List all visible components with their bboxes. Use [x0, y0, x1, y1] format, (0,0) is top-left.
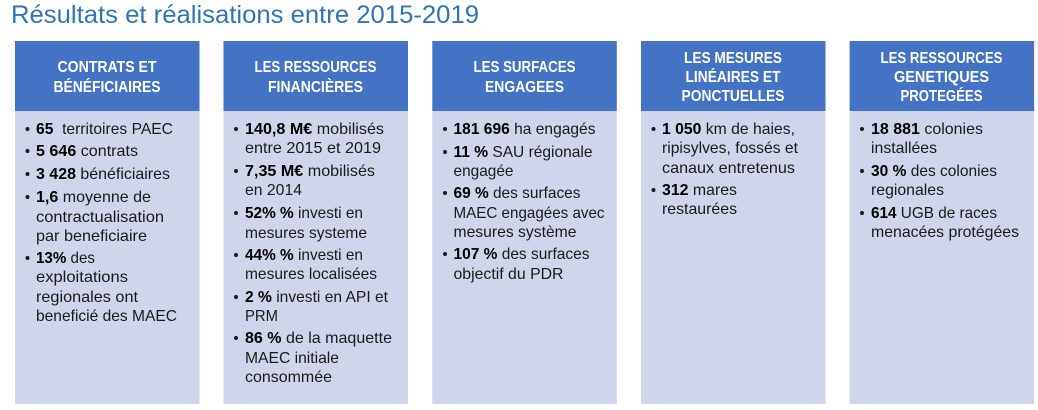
- text block: ressources financières list: 7,35 M€ mobilisés: [245, 163, 375, 180]
- text block: contrats et bénéficiaires list: regionales ont: [36, 289, 139, 306]
- panel: les ressources financières: [224, 41, 408, 404]
- text block: mesures linéaires list: [652, 121, 799, 218]
- text block: ressources financières list: 52% % investi en: [245, 205, 363, 222]
- text block: ressources financières list: 140,8 M€ mobilisés: [245, 121, 384, 138]
- heading: les ressources génétiques protégées: LES RESSOURCES: [880, 50, 1002, 67]
- heading: les ressources financières: [254, 59, 376, 96]
- text block: contrats et bénéficiaires list: 3 428 bénéficiaires: [36, 166, 170, 183]
- heading: les ressources génétiques protégées: GENETIQUES: [894, 69, 989, 86]
- heading: contrats et bénéficiaires: BÉNÉFICIAIRES: [54, 79, 160, 96]
- text block: ressources financières list: entre 2015 et 2019: [245, 140, 381, 157]
- text block: mesures linéaires list: restaurées: [662, 201, 737, 218]
- text block: ressources financières list: consommée: [245, 369, 332, 386]
- text block: ressources financières list: PRM: [245, 308, 278, 325]
- text block: ressources génétiques list: 18 881 colonies: [871, 121, 983, 138]
- text block: ressources génétiques list: regionales: [871, 182, 944, 199]
- text block: ressources financières list: [234, 121, 392, 386]
- heading: les mesures linéaires et ponctuelles: [682, 50, 784, 105]
- text block: contrats et bénéficiaires list: [26, 121, 177, 325]
- text block: contrats et bénéficiaires list: exploitations: [36, 269, 128, 286]
- text block: mesures linéaires list: ripisylves, fossés et: [662, 140, 799, 157]
- text block: ressources génétiques list: 30 % des colonies: [871, 163, 997, 180]
- text block: surfaces engagées list: objectif du PDR: [454, 266, 564, 283]
- text block: ressources financières list: 44% % investi en: [245, 247, 363, 264]
- heading: les mesures linéaires et ponctuelles: PONCTUELLES: [682, 88, 784, 105]
- title: Résultats et réalisations entre 2015-2019: [11, 1, 479, 29]
- text block: contrats et bénéficiaires list: contractualisation: [36, 209, 164, 226]
- heading: contrats et bénéficiaires: [54, 59, 160, 96]
- text block: contrats et bénéficiaires list: 1,6 moyenne de: [36, 189, 151, 206]
- text block: ressources financières list: mesures systeme: [245, 225, 367, 242]
- text block: mesures linéaires list: canaux entretenus: [662, 160, 795, 177]
- panel: les surfaces engagées: [432, 41, 617, 404]
- heading: les ressources financières: FINANCIÈRES: [268, 79, 363, 96]
- text block: contrats et bénéficiaires list: par beneficiaire: [36, 228, 147, 245]
- heading: les ressources financières: LES RESSOURCES: [254, 59, 376, 76]
- heading: les ressources génétiques protégées: PROTEGÉES: [900, 88, 982, 105]
- text block: surfaces engagées list: MAEC engagées avec: [454, 205, 604, 222]
- panel: les ressources génétiques protégées: [850, 41, 1034, 404]
- text block: contrats et bénéficiaires list: 5 646 contrats: [36, 143, 138, 160]
- text block: ressources génétiques list: [860, 121, 1019, 241]
- heading: les surfaces engagées: LES SURFACES: [474, 59, 576, 76]
- heading: les ressources génétiques protégées: [880, 50, 1002, 105]
- panel: les mesures linéaires et ponctuelles: [641, 41, 826, 404]
- text block: surfaces engagées list: engagée: [454, 163, 514, 180]
- text block: surfaces engagées list: 107 % des surfaces: [454, 246, 590, 263]
- text block: surfaces engagées list: [443, 121, 604, 283]
- heading: les surfaces engagées: [474, 59, 576, 96]
- panel: contrats et bénéficiaires: [15, 41, 200, 404]
- text block: surfaces engagées list: 69 % des surfaces: [454, 185, 580, 202]
- heading: contrats et bénéficiaires: CONTRATS ET: [58, 59, 157, 76]
- text block: surfaces engagées list: 181 696 ha engagés: [454, 121, 596, 138]
- text block: ressources génétiques list: 614 UGB de races: [871, 205, 997, 222]
- text block: ressources financières list: MAEC initiale: [245, 350, 339, 367]
- text block: surfaces engagées list: mesures système: [454, 224, 577, 241]
- text block: ressources financières list: 86 % de la maquette: [245, 330, 392, 347]
- text block: ressources financières list: mesures localisées: [245, 266, 377, 283]
- heading: les mesures linéaires et ponctuelles: LES MESURES: [684, 50, 782, 67]
- heading: les surfaces engagées: ENGAGEES: [485, 79, 564, 96]
- text block: mesures linéaires list: 312 mares: [662, 182, 737, 199]
- text block: ressources génétiques list: menacées protégées: [871, 224, 1019, 241]
- text block: ressources génétiques list: installées: [871, 140, 937, 157]
- text block: contrats et bénéficiaires list: 65 territoires PAEC: [36, 121, 173, 138]
- text block: mesures linéaires list: 1 050 km de haies,: [662, 121, 795, 138]
- text block: surfaces engagées list: 11 % SAU régionale: [454, 144, 593, 161]
- text block: ressources financières list: 2 % investi en API et: [245, 289, 389, 306]
- text block: contrats et bénéficiaires list: beneficié des MAEC: [36, 308, 177, 325]
- text block: ressources financières list: en 2014: [245, 182, 302, 199]
- heading: les mesures linéaires et ponctuelles: LINÉAIRES ET: [686, 69, 781, 86]
- text block: contrats et bénéficiaires list: 13% des: [36, 250, 95, 267]
